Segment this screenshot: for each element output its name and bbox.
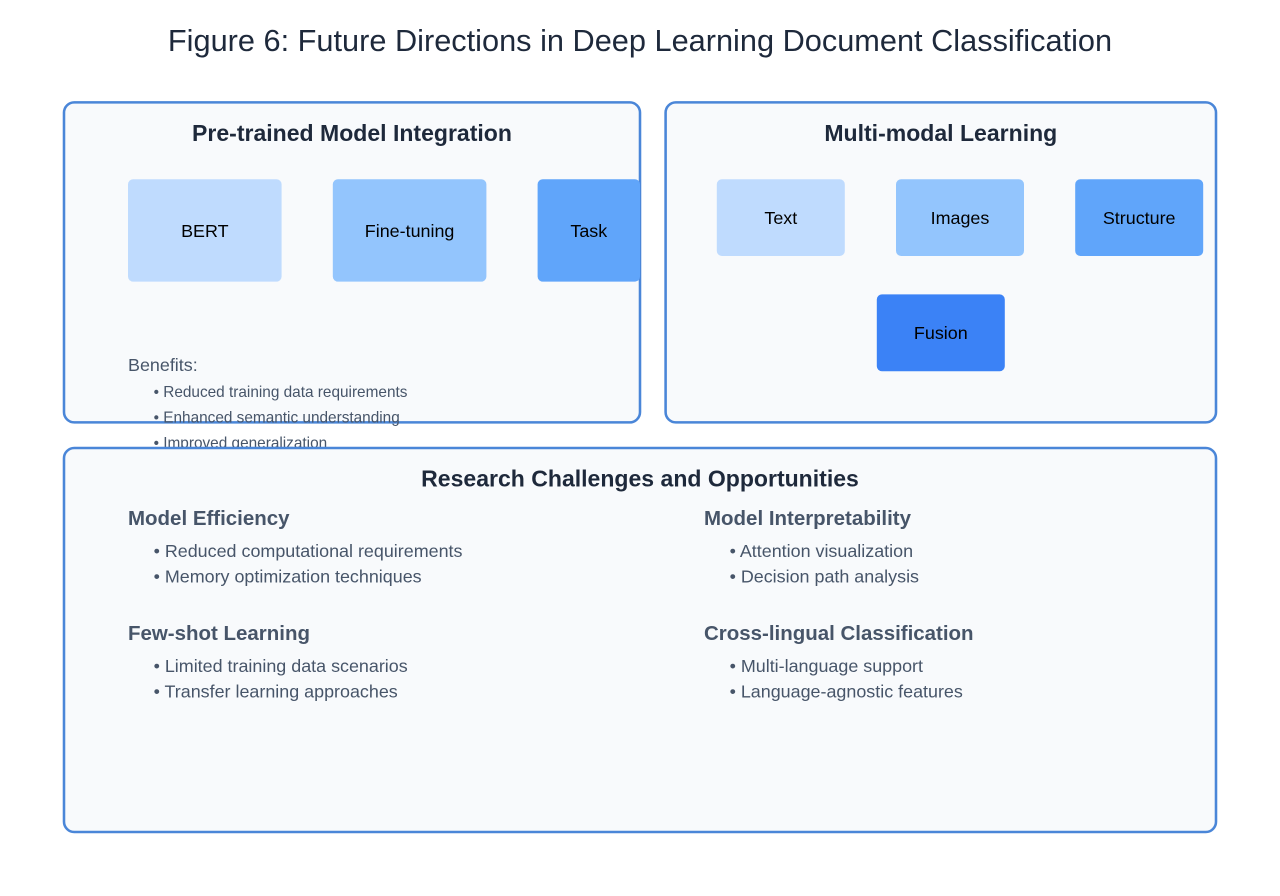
group: few-shot learning: Few-shot Learning: [128, 622, 310, 645]
heading: pre-trained: Pre-trained Model Integration: [192, 120, 512, 146]
box: Images: Images: [931, 208, 989, 228]
box: Structure: Structure: [1103, 208, 1176, 228]
heading: multi-modal: Multi-modal Learning: [824, 120, 1057, 146]
title: Figure 6: Future Directions in Deep Learning Document Classification: [168, 23, 1112, 58]
box: Fine-tuning: [333, 179, 486, 282]
box: Fusion: [877, 294, 1005, 371]
heading: research challenges: Research Challenges and Opportunities: [421, 465, 859, 491]
box: Text: [717, 179, 845, 256]
group: model efficiency: Model Efficiency: [128, 507, 290, 530]
panel: multi-modal learning: [666, 102, 1216, 422]
group: cross-lingual classification: [704, 622, 974, 702]
group: few-shot learning: • Transfer learning approaches: [154, 682, 398, 702]
group: few-shot learning: [128, 622, 408, 702]
group: few-shot learning: • Limited training data scenarios: [154, 656, 408, 676]
group: model efficiency: • Reduced computational requirements: [154, 541, 463, 561]
benefits list: [154, 384, 408, 452]
box: Fusion: Fusion: [914, 323, 968, 343]
group: model interpretability: • Decision path analysis: [730, 566, 919, 586]
box: BERT: BERT: [181, 221, 229, 241]
group: cross-lingual classification: • Language-agnostic features: [730, 682, 963, 702]
group: cross-lingual classification: Cross-lingual Classification: [704, 622, 974, 645]
panel: research challenges and opportunities: [64, 448, 1216, 832]
benefits list: • Enhanced semantic understanding: [154, 409, 400, 426]
group: model interpretability: Model Interpretability: [704, 507, 912, 530]
group: cross-lingual classification: • Multi-language support: [730, 656, 923, 676]
group: model efficiency: [128, 507, 463, 586]
box: BERT: [128, 179, 282, 282]
benefits label: Benefits:: [128, 355, 198, 375]
box: Task: Task: [570, 221, 607, 241]
group: model interpretability: [704, 507, 919, 586]
benefits list: • Reduced training data requirements: [154, 384, 408, 401]
panel: pre-trained model integration: [64, 102, 640, 452]
box: Structure: [1075, 179, 1203, 256]
box: Text: Text: [764, 208, 797, 228]
benefits list: • Improved generalization: [154, 435, 327, 452]
group: model interpretability: • Attention visualization: [730, 541, 913, 561]
group: model efficiency: • Memory optimization techniques: [154, 566, 422, 586]
box: Task: [538, 179, 640, 282]
box: Fine-tuning: Fine-tuning: [365, 221, 454, 241]
box: Images: [896, 179, 1024, 256]
